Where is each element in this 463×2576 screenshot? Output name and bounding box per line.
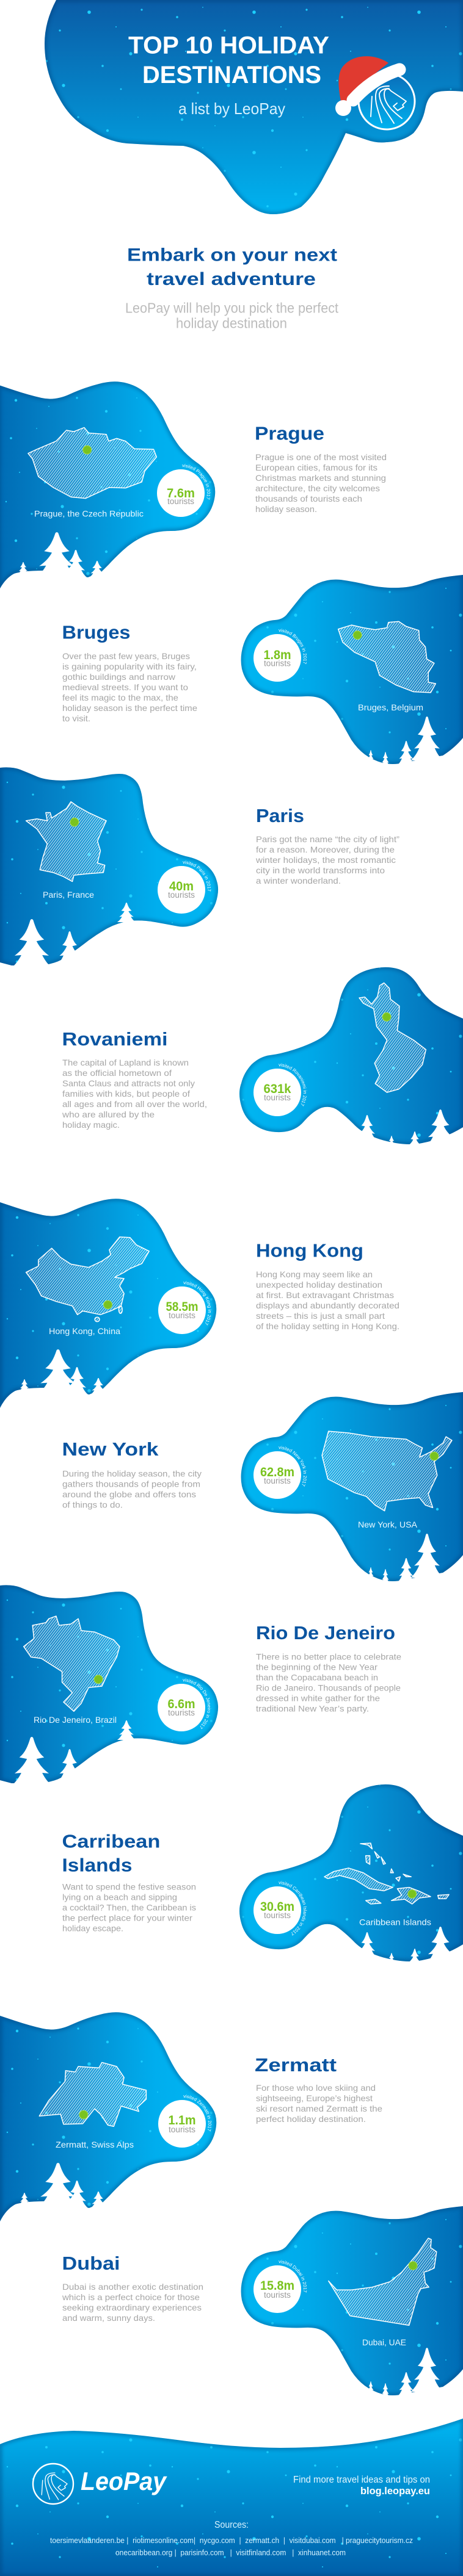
body text: Santa Claus and attracts not only	[62, 1078, 195, 1088]
panel: New York	[62, 1392, 463, 1581]
intro heading: Embark on your next	[127, 245, 337, 265]
stat: tourists: tourists	[264, 659, 291, 668]
body text: feel its magic to the max, the	[62, 693, 178, 702]
stat: tourists	[253, 2260, 307, 2313]
body text: a cocktail? Then, the Caribbean is	[62, 1903, 196, 1913]
map: Switzerland	[39, 2062, 146, 2126]
body text: Prague is one of the most visited	[255, 452, 387, 462]
body text: During the holiday season, the city	[62, 1468, 202, 1478]
stat: tourists: 58.5m	[166, 1300, 198, 1314]
body text: seeking extraordinary experiences	[62, 2303, 202, 2312]
stat: tourists	[253, 1446, 307, 1499]
title: TOP 10 HOLIDAY	[128, 32, 329, 59]
body text: Dubai is another exotic destination	[62, 2282, 203, 2292]
stat: tourists	[253, 1881, 307, 1936]
body text: thousands of tourists each	[255, 494, 362, 503]
subtitle: a list by LeoPay	[178, 99, 285, 118]
body text: winter holidays, the most romantic	[255, 855, 396, 865]
stat: tourists: tourists	[169, 1311, 195, 1320]
blob with trees	[0, 2012, 216, 2221]
stat: tourists	[158, 860, 211, 914]
blob with trees	[241, 575, 463, 767]
heading: Islands	[62, 1854, 132, 1876]
stat: tourists: 62.8m	[260, 1465, 294, 1479]
map: Belgium	[338, 621, 436, 693]
stat: tourists: visited Dubai in 2017	[279, 2260, 307, 2292]
panel: Caribbean Islands	[62, 1784, 463, 1961]
body text: perfect holiday destination.	[256, 2114, 366, 2124]
header blue blob	[45, 0, 463, 214]
stat: tourists: visited Carribean Islands in 2017	[279, 1881, 307, 1936]
map: Czech Republic	[28, 428, 156, 499]
stat: tourists	[157, 464, 210, 517]
panel: Zermatt	[0, 2012, 382, 2221]
heading: Prague	[255, 422, 324, 444]
logo wordmark: LeoPay	[81, 2467, 167, 2495]
icon: santa hat	[335, 56, 399, 116]
sources: onecaribbean.org | parisinfo.com | visitfinland.com | xinhuanet.com	[115, 2549, 346, 2557]
body text: is gaining popularity with its fairy,	[62, 662, 197, 671]
intro heading	[127, 245, 337, 289]
map: UAE	[329, 2238, 437, 2325]
body text	[62, 2282, 203, 2323]
body text: the perfect place for your winter	[62, 1913, 192, 1922]
body text: architecture, the city welcomes	[255, 483, 380, 493]
blob with trees	[239, 967, 463, 1150]
stat: tourists: 631k	[264, 1082, 291, 1096]
stat: tourists: 6.6m	[167, 1697, 195, 1711]
body text: to visit.	[62, 713, 90, 723]
stat: tourists	[158, 2094, 211, 2148]
stat: tourists: tourists	[264, 1911, 291, 1920]
map: Caribbean islands	[324, 1843, 449, 1904]
body text: For those who love skiing and	[256, 2083, 376, 2093]
body text: ski resort named Zermatt is the	[256, 2104, 382, 2113]
stat: tourists: visited Hong Kong in 2017	[183, 1281, 211, 1326]
caption: Paris, France	[43, 890, 94, 900]
heading: Dubai	[62, 2253, 120, 2274]
stat: tourists: tourists	[264, 1476, 291, 1485]
body text: at first. But extravagant Christmas	[256, 1290, 394, 1300]
heading	[62, 1831, 160, 1876]
stat: tourists	[158, 1678, 211, 1731]
map: China	[26, 1237, 149, 1322]
body text: holiday escape.	[62, 1924, 123, 1933]
body text	[256, 1269, 399, 1331]
body text: Want to spend the festive season	[62, 1882, 196, 1892]
panel: Rovaniemi	[62, 967, 463, 1144]
intro text: LeoPay will help you pick the perfect	[125, 300, 339, 316]
panel: Hong Kong	[0, 1199, 399, 1408]
body text: holiday magic.	[62, 1120, 120, 1130]
sources: toersimevlaanderen.be | riotimesonline.com| nycgo.com | zermatt.ch | visitdubai.com | praguecitytourism.cz	[50, 2536, 413, 2545]
blob with trees	[239, 1784, 463, 1967]
body text: of the holiday setting in Hong Kong.	[256, 1321, 399, 1331]
body text: as the official hometown of	[62, 1068, 172, 1078]
body text: around the globe and offers tons	[62, 1489, 196, 1499]
body text: unexpected holiday destination	[256, 1280, 382, 1290]
heading: Paris	[256, 805, 304, 826]
body text: Rio de Janeiro. Thousands of people	[256, 1683, 401, 1693]
stat: tourists: tourists	[168, 1708, 195, 1717]
stat: tourists: tourists	[264, 2290, 291, 2300]
stat: tourists: visited Paris in 2017	[183, 860, 211, 891]
body text	[255, 834, 399, 886]
body text: Paris got the name “the city of light”	[256, 834, 399, 844]
caption: Caribbean Islands	[359, 1918, 431, 1927]
intro text: holiday destination	[176, 315, 287, 331]
icon: LeoPay lion logo in a circle	[359, 73, 415, 129]
call to action	[293, 2475, 430, 2497]
title: DESTINATIONS	[142, 62, 321, 88]
blob with trees	[0, 767, 218, 969]
body text: holiday season.	[255, 504, 317, 514]
stat: tourists: visited New York in 2017	[279, 1446, 307, 1487]
map: USA	[322, 1431, 452, 1511]
body text: displays and abundantly decorated	[256, 1301, 399, 1310]
blob with trees	[0, 381, 215, 591]
body text	[62, 1882, 196, 1933]
body text: who are allured by the	[62, 1109, 155, 1119]
sources	[50, 2520, 413, 2557]
body text: for a reason. Moreover, during the	[256, 845, 395, 854]
stat: tourists: 30.6m	[260, 1900, 294, 1914]
map: Brazil	[24, 1616, 120, 1711]
body text	[256, 1651, 401, 1714]
heading: Hong Kong	[256, 1240, 363, 1261]
caption: Bruges, Belgium	[358, 702, 423, 712]
caption: Zermatt, Swiss Alps	[56, 2140, 134, 2149]
stat: tourists: 15.8m	[260, 2279, 294, 2293]
body text: gathers thousands of people from	[62, 1479, 200, 1489]
body text: European cities, famous for its	[255, 463, 377, 472]
intro heading: travel adventure	[147, 269, 316, 289]
stat: tourists	[253, 629, 307, 682]
heading: Bruges	[62, 621, 131, 643]
body text: medieval streets. If you want to	[62, 682, 188, 692]
body text	[62, 651, 197, 723]
heading: Zermatt	[255, 2054, 337, 2076]
body text: There is no better place to celebrate	[256, 1651, 401, 1661]
caption: Rio De Jeneiro, Brazil	[34, 1715, 117, 1725]
blob with trees	[241, 1392, 463, 1584]
body text: the beginning of the New Year	[256, 1662, 377, 1672]
call to action: blog.leopay.eu	[360, 2485, 430, 2497]
footer panel	[0, 2419, 463, 2576]
caption: Dubai, UAE	[362, 2337, 406, 2347]
body text: traditional New Year’s party.	[256, 1704, 369, 1714]
footer wave	[0, 2419, 463, 2576]
blob with trees	[241, 2206, 463, 2398]
panel: Prague	[0, 381, 387, 588]
body text: The capital of Lapland is known	[62, 1058, 189, 1067]
caption: New York, USA	[358, 1520, 418, 1529]
stat: tourists: 40m	[169, 879, 194, 893]
body text: dressed in white gather for the	[256, 1693, 380, 1703]
stat: tourists: visited Rovaniemi in 2017	[279, 1063, 307, 1106]
body text: which is a perfect choice for those	[62, 2292, 200, 2302]
body text: a winter wonderland.	[256, 876, 341, 886]
heading: Carribean	[62, 1831, 160, 1852]
body text: families with kids, but people of	[62, 1089, 190, 1099]
call to action: Find more travel ideas and tips on	[293, 2475, 430, 2485]
header panel	[45, 0, 463, 214]
body text: and warm, sunny days.	[62, 2313, 155, 2323]
panel: Dubai	[62, 2206, 463, 2395]
caption: Hong Kong, China	[49, 1326, 120, 1336]
stat: tourists: visited Zermatt in 2017	[183, 2094, 211, 2131]
panel: Rio De Jeneiro	[0, 1585, 401, 1783]
body text: city in the world transforms into	[256, 865, 385, 875]
heading: Rovaniemi	[62, 1028, 167, 1050]
stat: tourists: tourists	[168, 890, 195, 900]
sources: Sources:	[214, 2520, 249, 2530]
stat: tourists: visited Prague in 2017	[182, 464, 210, 500]
intro text	[125, 300, 339, 331]
map: Finland	[359, 983, 426, 1092]
stat: tourists	[158, 1281, 211, 1334]
body text: sightseeing, Europe’s highest	[256, 2093, 373, 2103]
panel: Bruges	[62, 575, 463, 764]
blob with trees	[0, 1199, 216, 1408]
stat: tourists: tourists	[167, 497, 194, 506]
icon: LeoPay lion logo	[33, 2464, 73, 2504]
body text: streets – this is just a small part	[256, 1311, 385, 1321]
stat: tourists: tourists	[264, 1093, 291, 1102]
stat: tourists	[253, 1063, 307, 1116]
caption: Prague, the Czech Republic	[34, 509, 144, 519]
body text	[62, 1058, 207, 1130]
map: France	[26, 802, 106, 881]
body text: Over the past few years, Bruges	[62, 651, 190, 661]
body text: Christmas markets and stunning	[255, 473, 386, 483]
stat: tourists: visited Bruges in 2017	[279, 629, 307, 664]
body text: gothic buildings and narrow	[62, 672, 176, 682]
title	[128, 32, 329, 88]
body text: than the Copacabana beach in	[256, 1672, 378, 1682]
stat: tourists: 1.1m	[169, 2113, 195, 2127]
heading: New York	[62, 1438, 159, 1460]
body text: all ages and from all over the world,	[62, 1099, 207, 1109]
body text: holiday season is the perfect time	[62, 703, 197, 713]
panel: Paris	[0, 767, 399, 965]
stat: tourists: 7.6m	[167, 486, 195, 500]
blob with trees	[0, 1585, 218, 1787]
stat: tourists: tourists	[169, 2125, 195, 2134]
stat: tourists: visited Rio De Jeneiro in 2017	[183, 1678, 211, 1730]
stat: tourists: 1.8m	[264, 648, 291, 662]
body text: lying on a beach and sipping	[62, 1892, 177, 1902]
body text: of things to do.	[62, 1500, 123, 1510]
body text: Hong Kong may seem like an	[256, 1269, 373, 1279]
body text	[256, 2083, 382, 2124]
body text	[62, 1468, 202, 1510]
body text	[255, 452, 387, 514]
heading: Rio De Jeneiro	[256, 1622, 395, 1643]
